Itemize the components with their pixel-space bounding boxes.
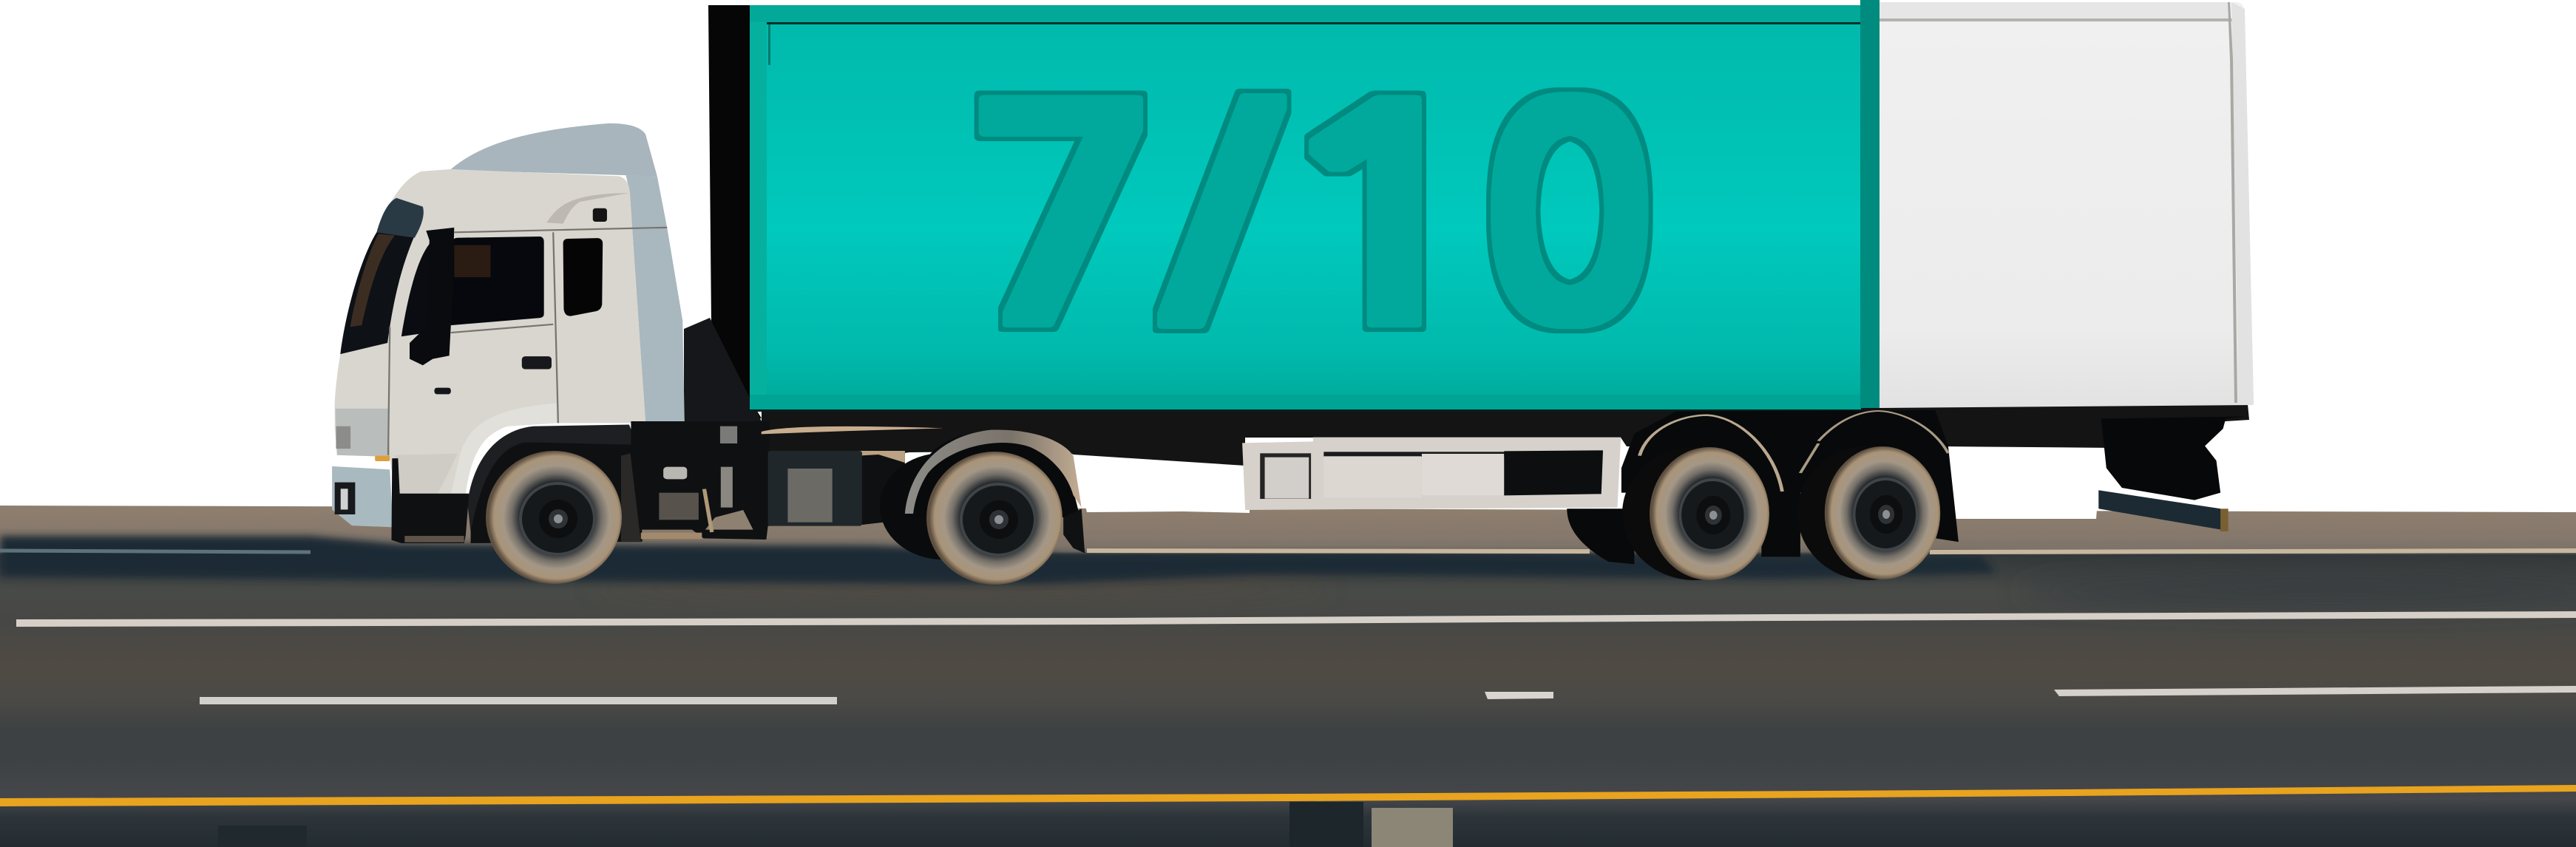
- windshield: [340, 232, 415, 354]
- wheel drive: [926, 452, 1062, 585]
- truck shadow on road: [0, 536, 1996, 584]
- engine dark base: [631, 421, 905, 540]
- engine pipe: [704, 489, 712, 532]
- rear bumper group: [2098, 416, 2246, 531]
- white gaps under truck: [1074, 443, 2119, 519]
- divider: [1860, 0, 1880, 408]
- door handle: [522, 356, 552, 370]
- yellow line: [0, 785, 2576, 806]
- indicator: [375, 456, 390, 461]
- rear window: [563, 238, 603, 316]
- door seam lines: [388, 228, 667, 455]
- mud flap: [2098, 490, 2228, 531]
- hidden rear tyre: [1567, 508, 1634, 564]
- roof marker: [593, 208, 607, 222]
- black step: [391, 458, 469, 543]
- drive axle hidden tyre: [880, 453, 1006, 559]
- road warm patch: [592, 581, 1331, 596]
- engine filter: [721, 467, 733, 508]
- windshield reflection: [350, 234, 395, 327]
- wheel arch trim: [467, 425, 637, 532]
- engine and cab rear dark area: [636, 318, 769, 473]
- wheel cab: [486, 451, 622, 584]
- rear tyre B tread: [1797, 446, 1939, 580]
- drive fender: [905, 430, 1085, 553]
- engine and tank group: [621, 421, 943, 542]
- flap edge: [2220, 508, 2228, 531]
- rear bumper: [2101, 416, 2246, 500]
- lower strip: [641, 533, 702, 539]
- bottom dark patch: [218, 826, 307, 847]
- 7/10 stat: /: [1162, 82, 1286, 344]
- box frame: [1242, 438, 1621, 510]
- tan chassis strip: [762, 426, 943, 434]
- lane dash right: [2054, 686, 2576, 696]
- roof fairing: [451, 123, 657, 176]
- centre panel right: [1422, 454, 1504, 495]
- bottom road marker: [1372, 808, 1453, 847]
- engine box: [659, 493, 699, 520]
- cab side panel: [626, 174, 685, 423]
- cab: [332, 123, 685, 543]
- wheel rear A: [1650, 447, 1769, 580]
- rear arches dark: [1621, 410, 1959, 557]
- trailer black front panel: [708, 5, 762, 418]
- road: [0, 506, 2576, 847]
- lower cab shading: [395, 454, 458, 494]
- cab rear patch: [720, 426, 737, 443]
- lower front shading: [336, 409, 390, 457]
- truck: [332, 0, 2254, 585]
- cab mudguard: [621, 453, 641, 542]
- step highlight: [404, 536, 464, 542]
- fender A trim: [1639, 415, 1782, 491]
- road edge line: [1087, 551, 2576, 552]
- grille: [336, 426, 350, 449]
- drive mud flap: [1063, 508, 1085, 553]
- road gap above rear: [829, 451, 905, 463]
- cab body: [335, 169, 645, 494]
- door window: [451, 237, 544, 325]
- centre panel left: [1323, 456, 1421, 497]
- left opening: [1260, 453, 1311, 499]
- arch highlight: [451, 403, 557, 494]
- 7/10 stat: 0: [1480, 75, 1657, 364]
- side lamp: [434, 388, 451, 394]
- tank plate: [787, 469, 833, 523]
- number plate: [341, 489, 348, 509]
- left panel: [1265, 457, 1309, 499]
- number plate recess: [335, 483, 355, 514]
- sun visor: [376, 198, 424, 238]
- lane dash left: [200, 697, 837, 704]
- side vent: [546, 193, 629, 224]
- road edge line in shadow: [0, 551, 311, 552]
- bottom road pillar shadow: [1289, 802, 1363, 847]
- road dark patch right: [2019, 574, 2576, 609]
- side skirt box: [1242, 438, 1621, 510]
- trailer teal panel: [750, 5, 1861, 412]
- visible road gap under engine: [705, 510, 753, 530]
- fuel tank: [768, 451, 862, 526]
- door front window: [401, 242, 451, 356]
- fender B trim: [1800, 411, 1948, 473]
- mirror: [410, 228, 454, 365]
- chassis: [762, 404, 2249, 473]
- arch interior: [471, 429, 643, 543]
- wheel rear B: [1825, 446, 1940, 579]
- centre opening: [1323, 452, 1506, 457]
- 7/10 stat: 1: [1263, 77, 1508, 364]
- dark window: [1504, 450, 1603, 495]
- chrome filter: [663, 467, 687, 479]
- white lane line: [16, 611, 2576, 627]
- rear tyre A tread: [1622, 447, 1767, 580]
- lane dash centre: [1485, 692, 1553, 699]
- drive arch interior: [906, 432, 1079, 517]
- door window interior tint: [454, 245, 490, 277]
- 7/10 stat: [963, 75, 1657, 364]
- front bumper: [332, 466, 393, 527]
- trailer white panel: [1880, 2, 2254, 408]
- 7/10 stat: 7: [963, 77, 1162, 364]
- rear wheels arch group: [1567, 410, 1959, 564]
